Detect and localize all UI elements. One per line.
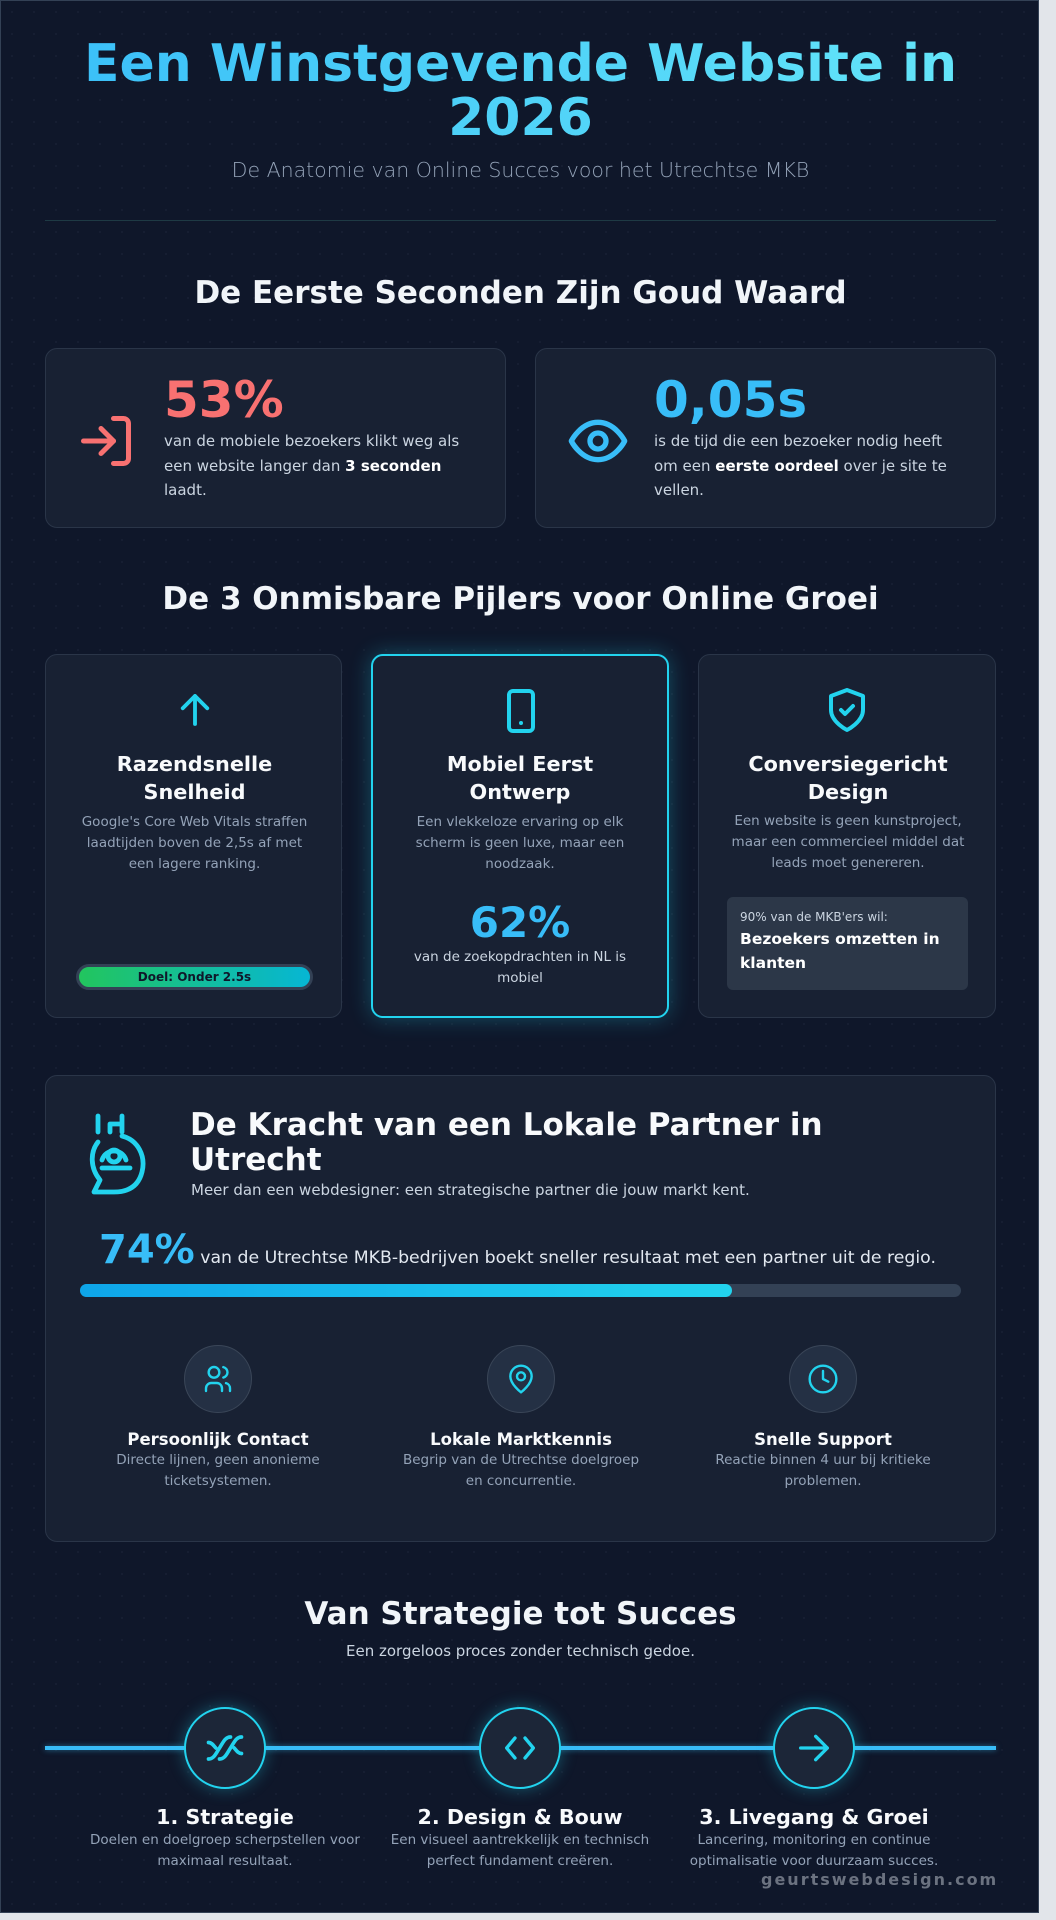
- stat text: 53%: [164, 371, 284, 429]
- stat 74%: 74% van de Utrechtse MKB-bedrijven boekt sneller resultaat met een partner uit de regio.: [99, 1227, 936, 1273]
- step 3: Lancering, monitoring en continue optimalisatie voor duurzaam succes.: [690, 1832, 938, 1869]
- feature: fast support: Reactie binnen 4 uur bij kritieke problemen.: [715, 1452, 931, 1489]
- icon: map pin: [487, 1345, 555, 1413]
- title: Ontwerp: [470, 780, 570, 804]
- pillar: speed: [45, 654, 342, 1018]
- heading: pillars: De 3 Onmisbare Pijlers voor Online Groei: [162, 581, 879, 617]
- stat 62%: [414, 898, 626, 986]
- title: 2026: [448, 88, 593, 148]
- feature: personal contact: Directe lijnen, geen anonieme ticketsystemen.: [116, 1452, 320, 1489]
- panel: local partner: [45, 1075, 996, 1542]
- stat 62%: 62%: [470, 898, 570, 947]
- subtitle: Meer dan een webdesigner: een strategische partner die jouw markt kent.: [191, 1181, 750, 1199]
- stat card: 0,05s: [535, 348, 996, 528]
- feature: local market: [403, 1345, 639, 1489]
- stat text: [654, 371, 947, 499]
- stat 62%: van de zoekopdrachten in NL is mobiel: [414, 949, 626, 986]
- icon: clock: [789, 1345, 857, 1413]
- progress bar: [80, 1284, 961, 1297]
- title: [748, 752, 948, 804]
- title: De Kracht van een Lokale Partner in: [190, 1107, 823, 1143]
- description: Google's Core Web Vitals straffen laadtijden boven de 2,5s af met een lagere ranking.: [82, 814, 307, 872]
- pill: goal: Doel: Onder 2.5s: [138, 970, 251, 984]
- step 2: Een visueel aantrekkelijk en technisch perfect fundament creëren.: [391, 1832, 649, 1869]
- icon: arrow right: [773, 1707, 855, 1789]
- subtitle: De Anatomie van Online Succes voor het Utrechtse MKB: [232, 158, 809, 182]
- icon: code: [479, 1707, 561, 1789]
- icon: local map/chat: [90, 1114, 146, 1194]
- title: Razendsnelle: [117, 752, 272, 776]
- stat text: 0,05s: [654, 371, 807, 429]
- step 2: [391, 1699, 649, 1869]
- feature: fast support: [715, 1345, 931, 1489]
- icon: eye: [568, 420, 628, 462]
- step 1: [90, 1699, 360, 1869]
- title: [1, 37, 1040, 145]
- feature: local market: Lokale Marktkennis: [430, 1430, 612, 1449]
- step 1: 1. Strategie: [156, 1805, 294, 1829]
- title: [447, 752, 593, 804]
- feature: local market: Begrip van de Utrechtse doelgroep en concurrentie.: [403, 1452, 639, 1489]
- title: Snelheid: [144, 780, 245, 804]
- stat card: 53%: [45, 348, 506, 528]
- process subtitle: Een zorgeloos proces zonder technisch gedoe.: [346, 1642, 695, 1660]
- title: Design: [808, 780, 888, 804]
- feature: personal contact: Persoonlijk Contact: [127, 1430, 309, 1449]
- icon: phone: [507, 689, 535, 733]
- title: Een Winstgevende Website in: [84, 34, 957, 94]
- step 3: [690, 1699, 938, 1869]
- description: Een website is geen kunstproject, maar een commercieel middel dat leads moet genereren.: [732, 813, 964, 871]
- pillar: mobile: [371, 654, 669, 1018]
- stat text: van de mobiele bezoekers klikt weg als een website langer dan 3 seconden laadt.: [164, 432, 459, 499]
- title: [190, 1107, 823, 1178]
- title: Mobiel Eerst: [447, 752, 593, 776]
- step 1: Doelen en doelgroep scherpstellen voor maximaal resultaat.: [90, 1832, 360, 1869]
- icon: shield: [829, 688, 865, 732]
- title: Utrecht: [190, 1142, 322, 1178]
- stat text: is de tijd die een bezoeker nodig heeft om een eerste oordeel over je site te vellen.: [654, 432, 947, 499]
- title: [117, 752, 272, 804]
- icon: arrow up: [180, 694, 210, 726]
- callout box: Bezoekers omzetten in klanten: [740, 930, 940, 972]
- pill: goal: [76, 964, 313, 990]
- description: Een vlekkeloze ervaring op elk scherm is geen luxe, maar een noodzaak.: [416, 814, 624, 872]
- callout box: 90% van de MKB'ers wil:: [740, 910, 888, 924]
- icon: strategy: [184, 1707, 266, 1789]
- pillar: conversion: [698, 654, 996, 1018]
- feature: personal contact: [116, 1345, 320, 1489]
- heading: first seconds: De Eerste Seconden Zijn Goud Waard: [194, 275, 847, 311]
- stat text: [164, 371, 459, 499]
- icon: users: [184, 1345, 252, 1413]
- step 2: 2. Design & Bouw: [418, 1805, 622, 1829]
- feature: fast support: Snelle Support: [754, 1430, 892, 1449]
- watermark: geurtswebdesign.com: [761, 1870, 998, 1889]
- heading: process: Van Strategie tot Succes: [304, 1596, 737, 1632]
- timeline line: [45, 1746, 996, 1750]
- step 3: 3. Livegang & Groei: [699, 1805, 929, 1829]
- icon: exit arrow: [81, 416, 131, 466]
- callout box: [727, 897, 968, 990]
- title: Conversiegericht: [748, 752, 948, 776]
